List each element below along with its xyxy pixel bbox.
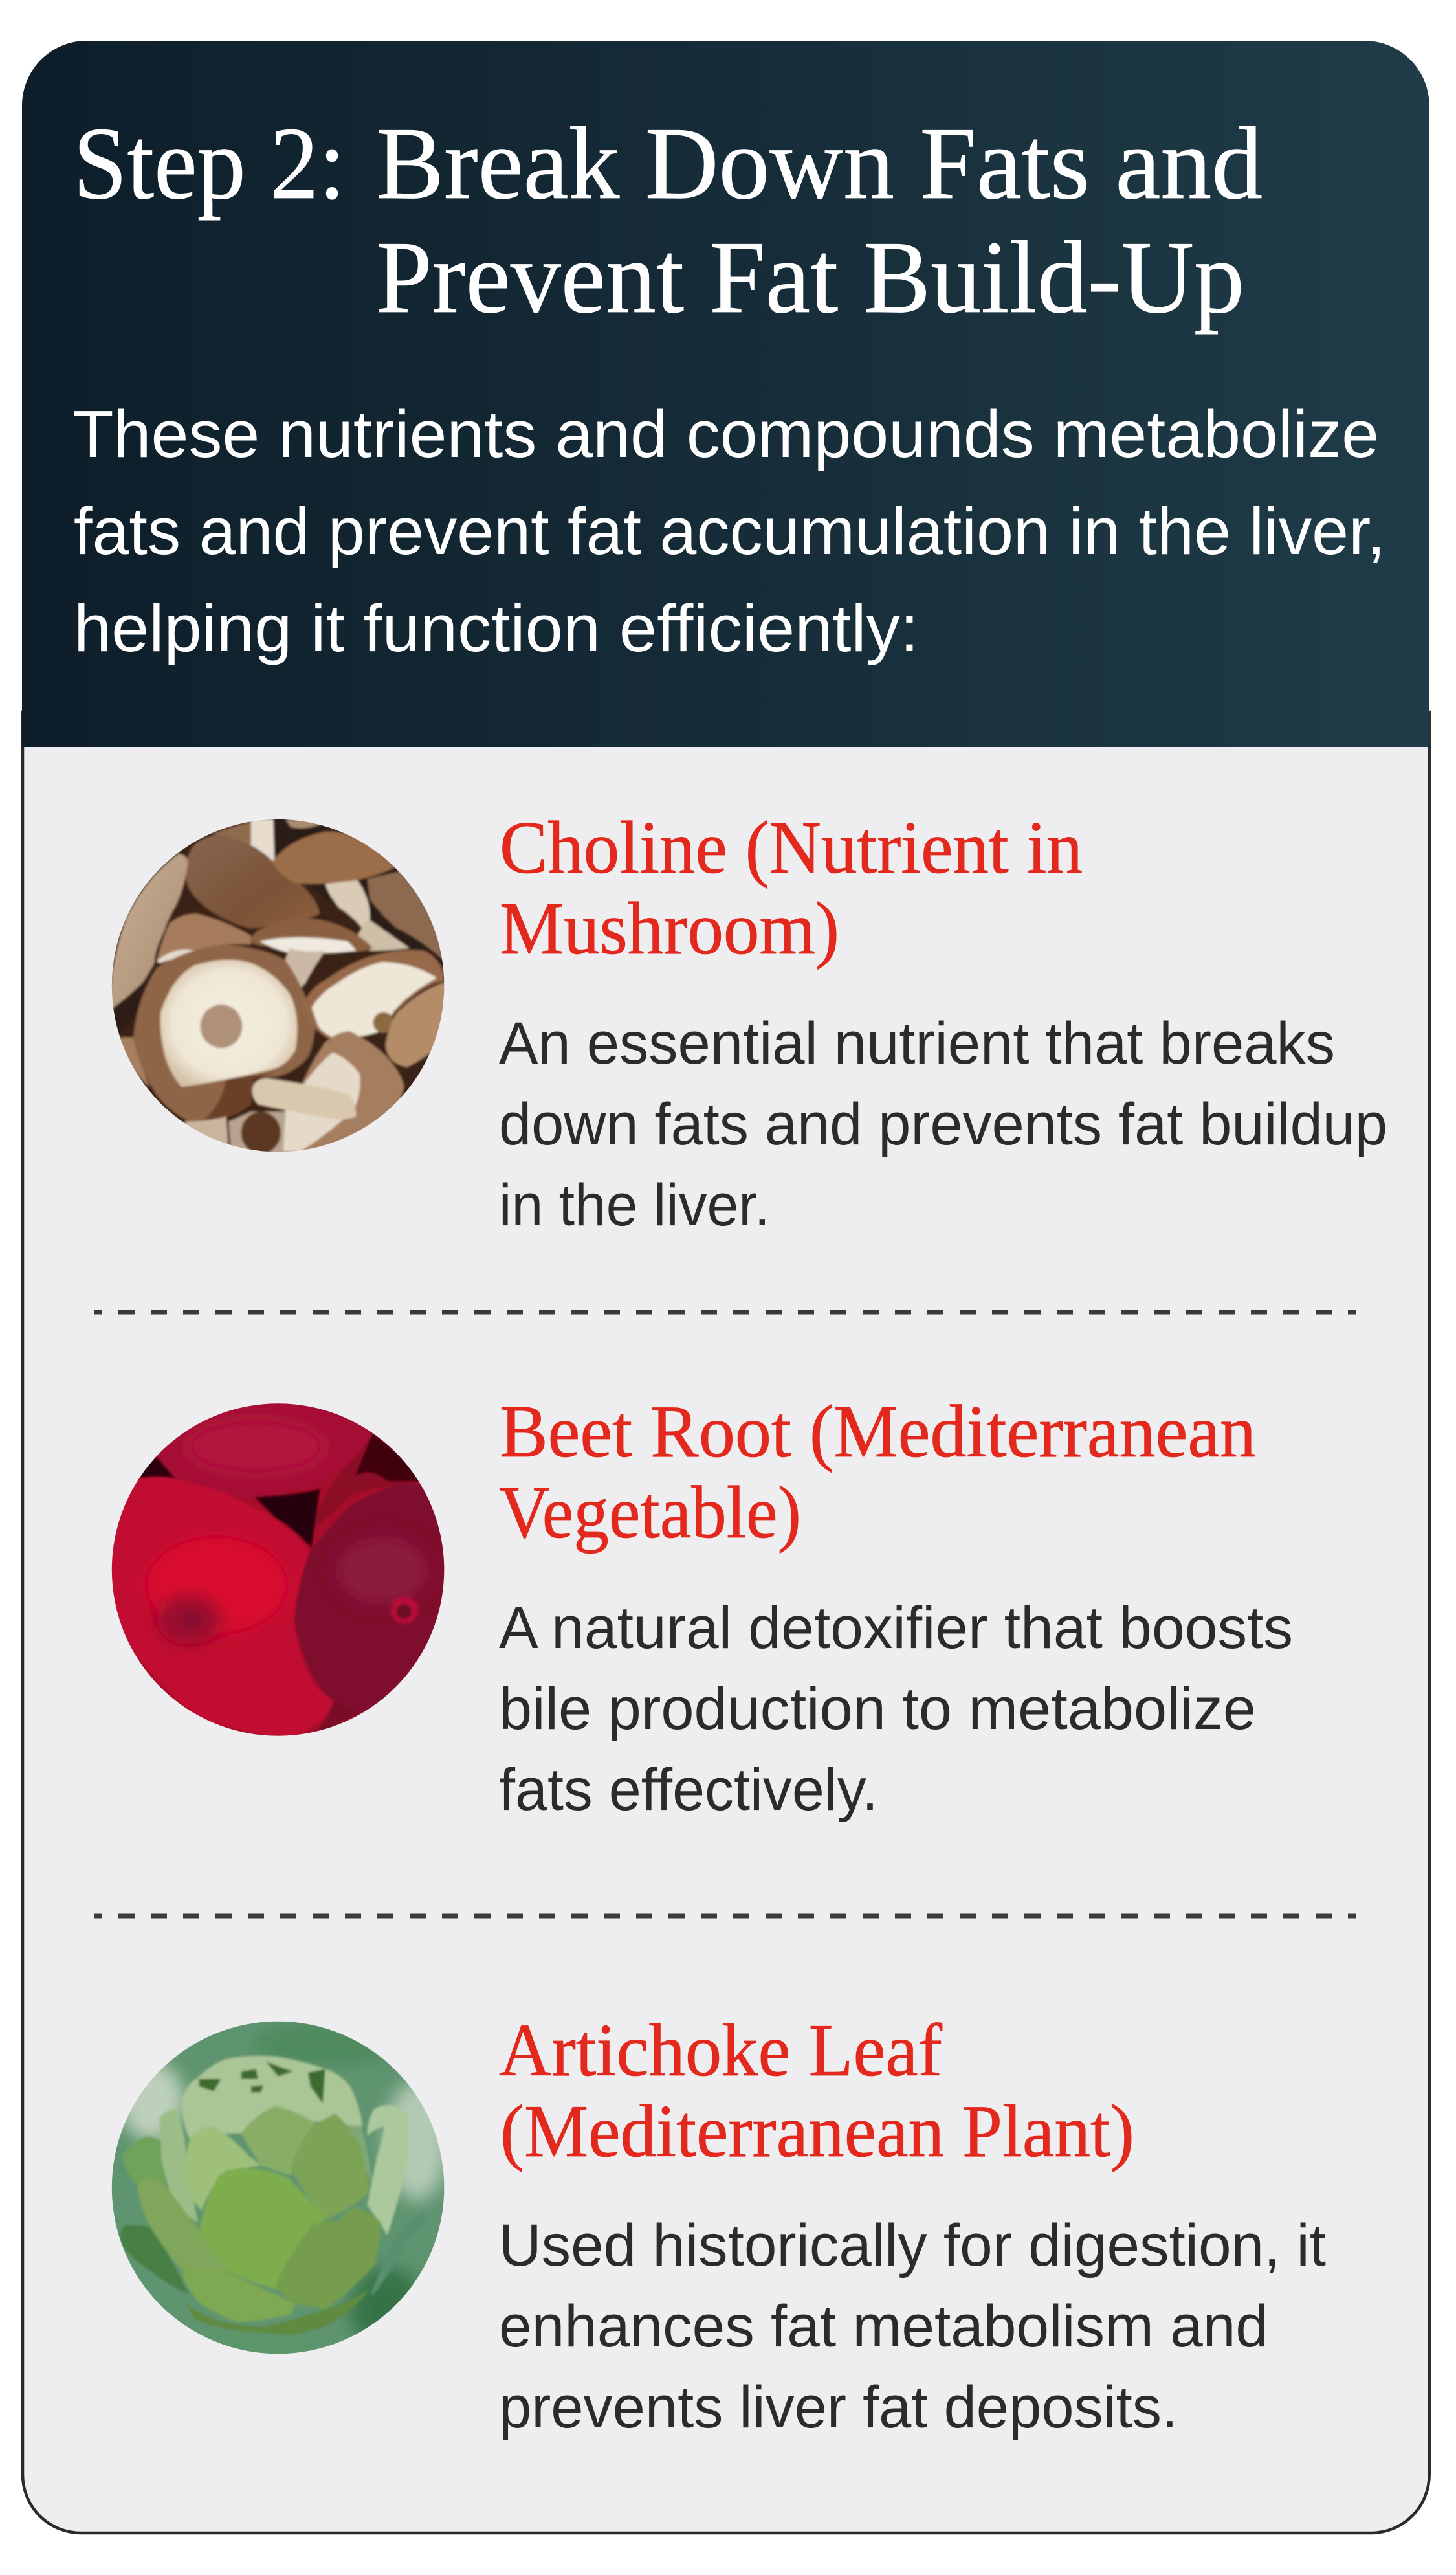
item: artichoke leaf [499, 2009, 1326, 2440]
panel: card body [23, 712, 1429, 2533]
heading [73, 106, 1263, 335]
intro text: fats and prevent fat accumulation in the liver, [74, 494, 1385, 568]
description: artichoke leaf: enhances fat metabolism and [499, 2293, 1268, 2359]
title: artichoke leaf: (Mediterranean Plant) [500, 2090, 1134, 2172]
description: choline: in the liver. [499, 1172, 770, 1238]
description: choline: down fats and prevents fat buildup [499, 1091, 1387, 1157]
description: artichoke leaf [499, 2213, 1326, 2440]
title: beet root [499, 1390, 1256, 1554]
title: choline: Choline (Nutrient in [500, 807, 1083, 889]
intro text [72, 397, 1385, 665]
heading: Break Down Fats and [376, 106, 1263, 221]
title: beet root: Vegetable) [499, 1471, 801, 1554]
intro text: These nutrients and compounds metabolize [72, 397, 1379, 471]
description: artichoke leaf: Used historically for digestion, it [499, 2213, 1326, 2279]
item: beet root [499, 1390, 1293, 1823]
description: beet root: fats effectively. [499, 1757, 878, 1823]
divider [94, 1310, 1356, 1314]
image: artichoke [102, 2012, 454, 2361]
description: choline: An essential nutrient that breaks [499, 1010, 1335, 1076]
panel: header banner [22, 41, 1429, 747]
description: choline [499, 1010, 1387, 1238]
image: mushrooms [102, 812, 454, 1159]
description: artichoke leaf: prevents liver fat deposits. [499, 2374, 1178, 2440]
item: choline [499, 807, 1387, 1238]
heading: Prevent Fat Build-Up [376, 219, 1244, 335]
description: beet root: A natural detoxifier that boosts [499, 1595, 1293, 1661]
divider [94, 1913, 1356, 1919]
intro text: helping it function efficiently: [74, 591, 919, 665]
title: artichoke leaf: Artichoke Leaf [499, 2009, 943, 2091]
heading: Step 2: [73, 106, 346, 221]
title: beet root: Beet Root (Mediterranean [500, 1390, 1256, 1473]
description: beet root: bile production to metabolize [499, 1676, 1256, 1742]
title: choline [500, 807, 1083, 970]
title: artichoke leaf [499, 2009, 1134, 2172]
title: choline: Mushroom) [500, 887, 839, 970]
description: beet root [499, 1595, 1293, 1823]
image: beet root [102, 1394, 454, 1741]
